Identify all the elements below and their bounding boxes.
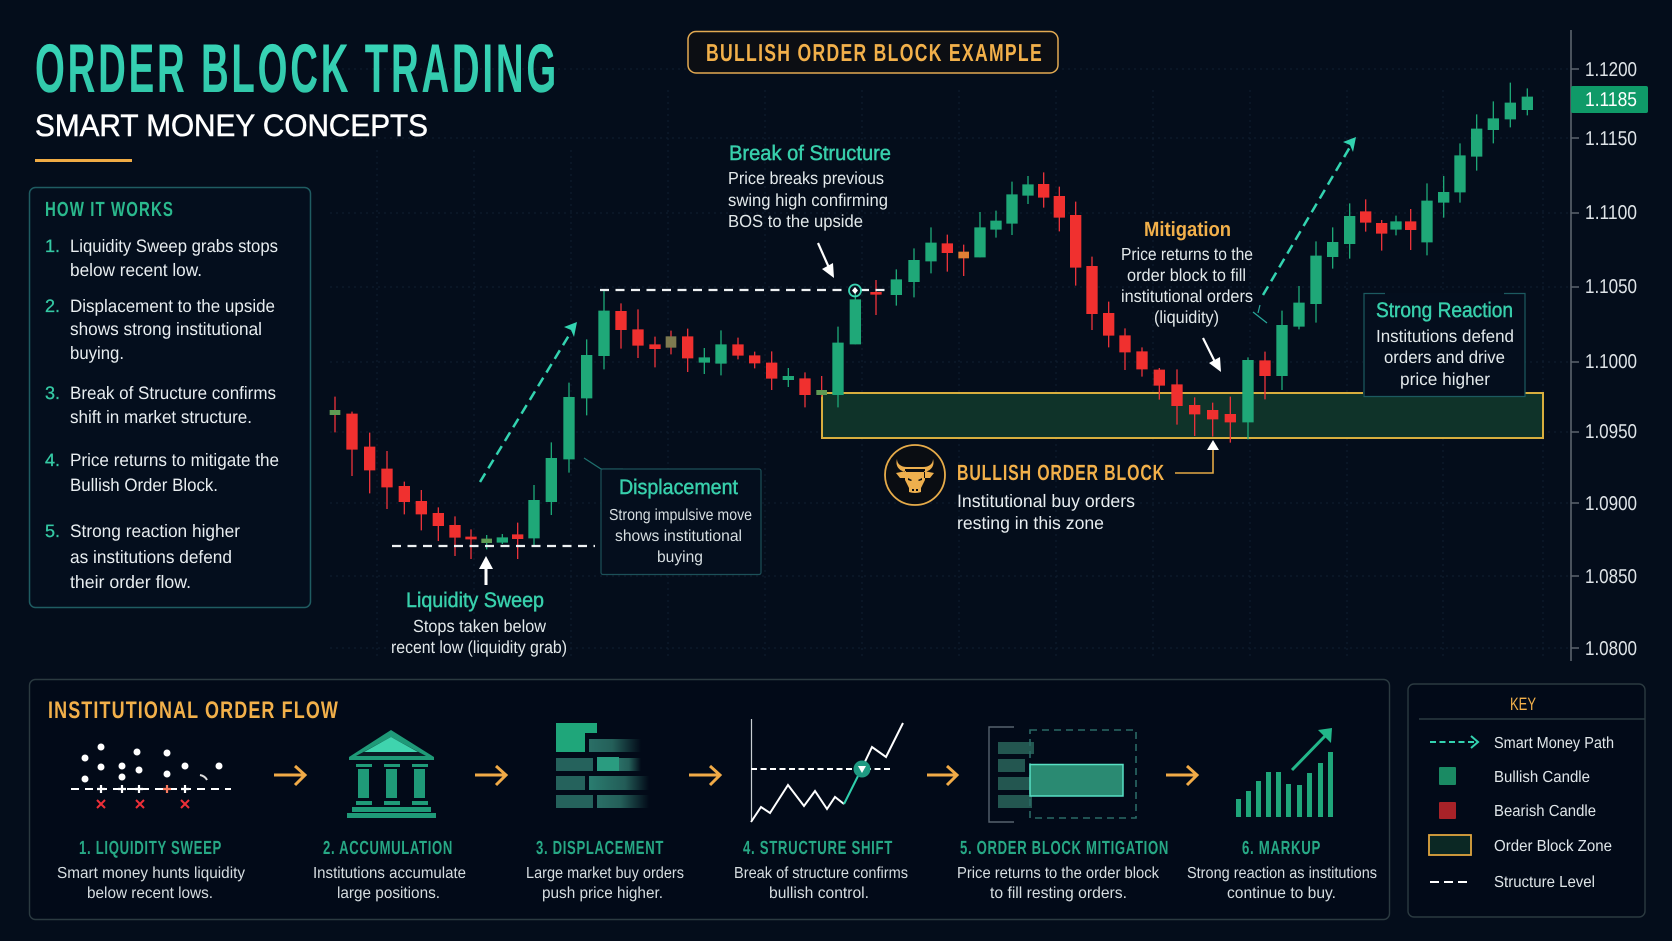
step 2 text: Displacement to the upside	[70, 296, 275, 316]
third section: x=1200+z/3	[1265, 83, 1527, 399]
callout: bullish order block: BULLISH ORDER BLOCK	[957, 460, 1165, 485]
key: bullish candle: Bullish Candle	[1494, 769, 1590, 786]
callout: bullish order block	[957, 440, 1219, 533]
step 4 text: 4.	[45, 450, 60, 470]
subtitle: SMART MONEY CONCEPTS	[35, 108, 428, 143]
step 3 label	[526, 838, 684, 902]
step 4 label	[734, 838, 908, 902]
price axis	[1571, 30, 1637, 661]
icon: bull	[885, 445, 945, 505]
current price tag	[1571, 86, 1648, 113]
step 5 label: to fill resting orders.	[990, 885, 1127, 902]
icon: order block mitigation	[989, 727, 1136, 822]
step 6 label: 6. MARKUP	[1242, 838, 1321, 859]
badge: bullish order block example	[688, 32, 1058, 73]
step 6 label: Strong reaction as institutions	[1187, 865, 1377, 882]
arrow 4	[927, 766, 957, 785]
callout: bullish order block: resting in this zone	[957, 513, 1104, 533]
first section: x=320+z/3	[335, 290, 822, 559]
key heading: KEY	[1510, 694, 1536, 714]
step 1 text: 1.	[45, 236, 60, 256]
step 3 label: 3. DISPLACEMENT	[536, 838, 664, 859]
callout: displacement: shows institutional	[615, 528, 742, 545]
arrow: smart money path 1	[480, 322, 577, 482]
panel: how it works	[30, 188, 310, 608]
key: smart money path	[1430, 735, 1614, 752]
step 3 text	[45, 383, 276, 427]
key: order block zone	[1429, 835, 1612, 855]
key: smart money path: Smart Money Path	[1494, 735, 1614, 752]
step 3 label: Large market buy orders	[526, 865, 684, 882]
callout: break of structure	[728, 142, 891, 231]
step 2 label: 2. ACCUMULATION	[323, 838, 453, 859]
step 2 text: 2.	[45, 296, 60, 316]
callout: mitigation	[1121, 218, 1253, 327]
callout: liquidity sweep: recent low (liquidity grab)	[391, 637, 567, 657]
price axis: 1.0800	[1585, 638, 1637, 660]
step 4 text: Price returns to mitigate the	[70, 450, 279, 470]
step 6 label	[1187, 838, 1377, 902]
key: bullish candle	[1439, 767, 1590, 786]
step 2 label: large positions.	[337, 885, 440, 902]
step 1 label: Smart money hunts liquidity	[57, 865, 245, 882]
title: ORDER BLOCK TRADING	[35, 30, 559, 107]
callout: strong reaction	[1253, 293, 1525, 397]
structure level: sweep low	[392, 545, 595, 547]
heading: institutional order flow: INSTITUTIONAL ORDER FLOW	[48, 697, 339, 724]
step 5 text: as institutions defend	[70, 547, 232, 567]
panel: key	[1408, 684, 1645, 917]
callout: break of structure: swing high confirming	[728, 190, 888, 210]
key: order block zone: Order Block Zone	[1494, 838, 1612, 855]
callout: liquidity sweep	[391, 589, 567, 657]
callout: mitigation: Mitigation	[1144, 218, 1231, 241]
step 3 text: 3.	[45, 383, 60, 403]
callout: break of structure: BOS to the upside	[728, 211, 863, 231]
arrow: break of structure	[818, 243, 834, 278]
price axis: 1.0900	[1585, 493, 1637, 515]
callout: strong reaction: Institutions defend	[1376, 326, 1514, 346]
step 2 text	[45, 296, 275, 363]
callout: bullish order block: Institutional buy orders	[957, 491, 1135, 511]
callout: break of structure: Price breaks previous	[728, 168, 884, 188]
step 5 text: Strong reaction higher	[70, 521, 240, 541]
callout: displacement: Strong impulsive move	[609, 507, 752, 524]
key: structure level: Structure Level	[1494, 874, 1595, 891]
key: bearish candle: Bearish Candle	[1494, 803, 1596, 820]
step 1 label: below recent lows.	[87, 885, 213, 902]
callout: mitigation: Price returns to the	[1121, 244, 1253, 264]
callout: displacement	[584, 458, 761, 574]
callout: break of structure: Break of Structure	[729, 142, 891, 165]
step 6 label: continue to buy.	[1227, 885, 1336, 902]
second section: x=820+z/3	[838, 172, 1248, 443]
step 5 label	[957, 838, 1169, 902]
panel: institutional order flow	[30, 680, 1390, 920]
step 4 text	[45, 450, 279, 495]
price axis: 1.1100	[1585, 202, 1637, 224]
price axis: 1.0850	[1585, 566, 1637, 588]
callout: displacement: Displacement	[619, 476, 738, 499]
price axis: 1.1000	[1585, 351, 1637, 373]
step 1 label	[57, 838, 245, 902]
step 5 text: 5.	[45, 521, 60, 541]
structure level: break of structure	[600, 289, 886, 291]
key: bearish candle	[1439, 802, 1596, 820]
step 5 text	[45, 521, 240, 592]
step 5 label: 5. ORDER BLOCK MITIGATION	[960, 838, 1169, 859]
callout: mitigation: order block to fill	[1127, 265, 1246, 285]
callout: liquidity sweep: Liquidity Sweep	[406, 589, 544, 612]
break of structure marker	[849, 284, 861, 296]
icon: displacement blocks	[556, 723, 649, 808]
icon: structure shift chart	[751, 719, 903, 822]
arrow 1	[274, 766, 305, 785]
callout: mitigation: (liquidity)	[1154, 307, 1219, 327]
price axis: 1.1050	[1585, 276, 1637, 298]
order block zone	[822, 393, 1543, 438]
callout: displacement: buying	[657, 549, 703, 566]
step 3 label: push price higher.	[542, 885, 663, 902]
step 5 text: their order flow.	[70, 572, 191, 592]
arrow 5	[1166, 766, 1197, 785]
title underline	[35, 159, 132, 162]
price axis: 1.1150	[1585, 128, 1637, 150]
step 2 label	[313, 838, 466, 902]
step 1 text	[45, 236, 278, 280]
arrow: smart money path 2	[1263, 137, 1356, 295]
step 2 label: Institutions accumulate	[313, 865, 466, 882]
icon: institution building	[347, 730, 436, 818]
callout: strong reaction: orders and drive	[1384, 347, 1505, 367]
step 4 text: Bullish Order Block.	[70, 475, 218, 495]
icon: liquidity sweep dots	[71, 744, 231, 808]
candlestick chart	[335, 83, 1527, 559]
price axis: 1.1200	[1585, 59, 1637, 81]
current price tag: 1.1185	[1585, 89, 1637, 111]
step 3 text: shift in market structure.	[70, 407, 252, 427]
callout: mitigation: institutional orders	[1121, 286, 1253, 306]
step 4 label: 4. STRUCTURE SHIFT	[743, 838, 893, 859]
step 1 label: 1. LIQUIDITY SWEEP	[79, 838, 222, 859]
arrow: mitigation	[1203, 338, 1221, 372]
price axis: 1.0950	[1585, 421, 1637, 443]
callout: liquidity sweep: Stops taken below	[413, 616, 546, 636]
step 3 text: Break of Structure confirms	[70, 383, 276, 403]
badge: bullish order block example: BULLISH ORDER BLOCK EXAMPLE	[706, 40, 1043, 67]
step 4 label: bullish control.	[769, 885, 869, 902]
step 4 label: Break of structure confirms	[734, 865, 908, 882]
step 1 text: Liquidity Sweep grabs stops	[70, 236, 278, 256]
arrow 3	[689, 766, 720, 785]
step 2 text: buying.	[70, 343, 124, 363]
step 2 text: shows strong institutional	[70, 319, 262, 339]
callout: strong reaction: price higher	[1400, 369, 1490, 389]
step 1 text: below recent low.	[70, 260, 202, 280]
callout: strong reaction: Strong Reaction	[1376, 299, 1513, 322]
arrow: liquidity sweep up	[479, 556, 493, 585]
arrow 2	[475, 766, 506, 785]
icon: markup bars	[1236, 728, 1333, 817]
step 5 label: Price returns to the order block	[957, 865, 1160, 882]
heading: how it works: HOW IT WORKS	[45, 198, 174, 221]
